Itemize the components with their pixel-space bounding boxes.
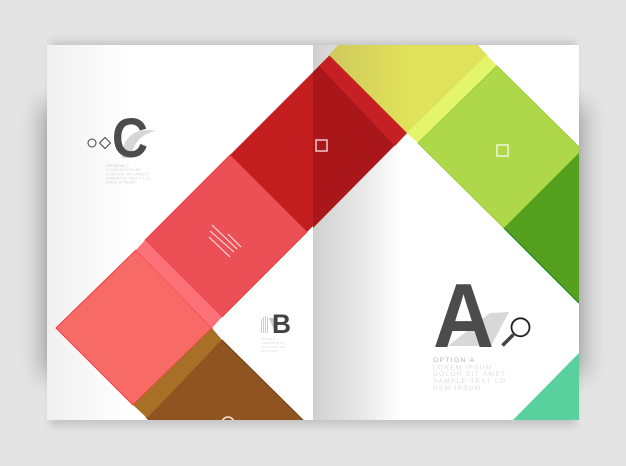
- text block: option C: LOREM IPSUM: [106, 167, 141, 172]
- text block: option C: REM IPSUM: [106, 180, 135, 184]
- icon: diagonal lines: [209, 225, 241, 257]
- diagonal ribbon graphics: [56, 45, 579, 421]
- letter A: A: [433, 266, 494, 367]
- icon: small diamond: [100, 138, 110, 148]
- red ribbon light segment: [56, 250, 212, 405]
- text block: option B: [261, 337, 285, 353]
- text block: option C: [106, 163, 150, 184]
- brown strip: [133, 328, 222, 418]
- text block: option C: DOLOR SIT AMET: [106, 172, 150, 176]
- text block: option B: OPTION B: [261, 337, 275, 341]
- text block: option B: OR SIT AMET SAM: [261, 345, 285, 349]
- red ribbon medium segment: [145, 155, 307, 317]
- light green segment: [418, 66, 579, 228]
- text block: option C: SAMPLE TEXT LO: [106, 176, 150, 180]
- panel: right page: [313, 45, 579, 420]
- lime strip: [407, 55, 497, 143]
- text block: option B: PLE TEXT: [261, 349, 278, 353]
- brown segment: [146, 340, 304, 421]
- text block: option A: REM IPSUM: [433, 385, 480, 392]
- icon: small circle: [88, 139, 96, 147]
- letter A shadow: [448, 312, 509, 346]
- teal segment: [512, 353, 579, 421]
- icon: square on dark red: [316, 140, 327, 151]
- letter C shadow: [122, 130, 156, 158]
- text block: option A: [433, 357, 505, 392]
- letter B: B: [272, 309, 291, 339]
- text block: option A: LOREM IPSUM: [433, 364, 491, 372]
- icon: square on green: [497, 145, 508, 156]
- panel: left page: [47, 45, 313, 420]
- red ribbon dark segment: [230, 55, 407, 232]
- background side shadow: [42, 105, 584, 375]
- red ribbon edge strip: [319, 55, 407, 146]
- icon: circle on brown: [222, 416, 234, 420]
- text block: option C: OPTION C: [106, 163, 129, 168]
- red ribbon light strip: [136, 240, 222, 328]
- yellow segment: [329, 45, 487, 133]
- icon: magnifier: [502, 318, 530, 346]
- icon: B bars: [262, 316, 274, 333]
- red ribbon overlap on right page: [313, 55, 407, 228]
- text block: option A: DOLOR SIT AMET: [433, 371, 505, 378]
- text block: option A: SAMPLE TEXT LO: [433, 378, 505, 385]
- text block: option B: LOREM IPSUM DOL: [261, 341, 285, 345]
- background edge shadow: [50, 41, 576, 426]
- text block: option A: OPTION A: [433, 357, 475, 364]
- letter C: C: [112, 106, 148, 169]
- dark green segment: [504, 153, 579, 303]
